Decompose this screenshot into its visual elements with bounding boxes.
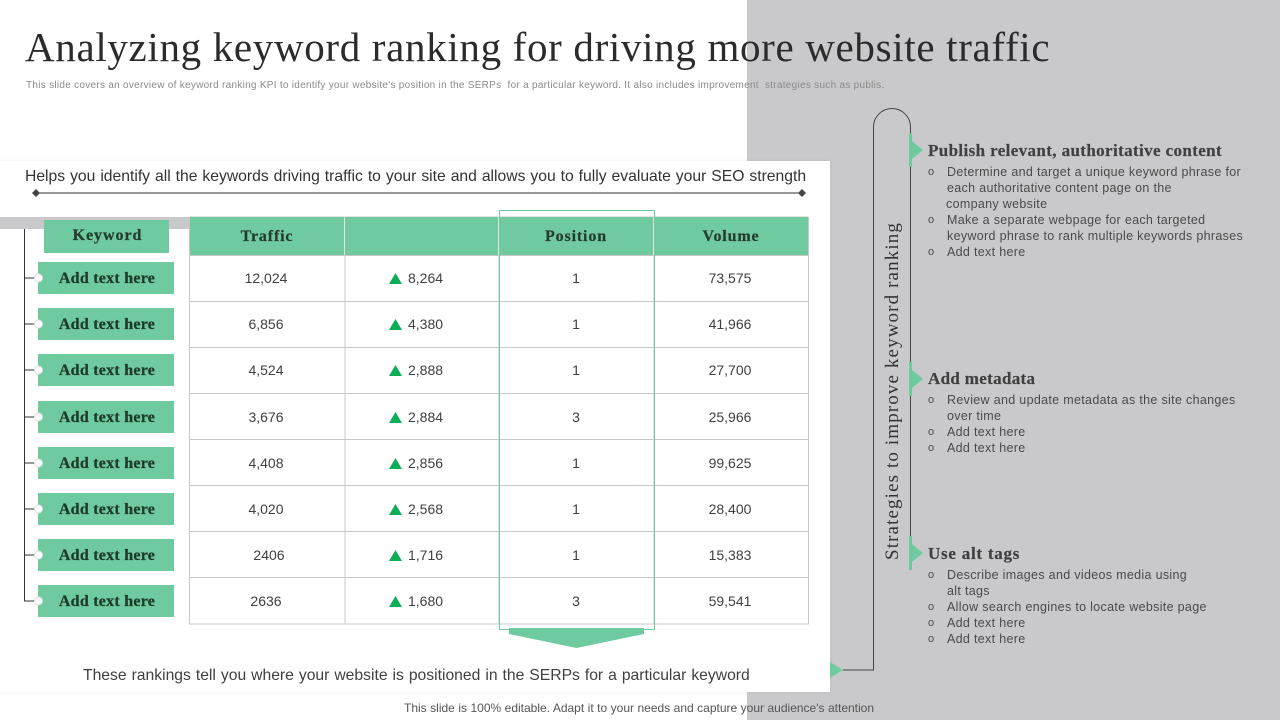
position column: 3 (572, 593, 580, 609)
arrow: connector from card to strategies (830, 108, 911, 678)
volume column: 59,541 (709, 593, 751, 609)
volume column: 41,966 (709, 316, 751, 332)
marker (909, 362, 923, 396)
keyword label 6: Add text here (59, 501, 155, 518)
panel: white table card (0, 161, 830, 692)
bullet text: use alt tags: Add text here (947, 632, 1026, 646)
bullet text: publish content: keyword phrase to rank multiple keywords phrases (947, 229, 1243, 243)
traffic column: 6,856 (248, 316, 284, 332)
keyword label 5 (38, 447, 174, 479)
header: change (blank) (345, 217, 498, 255)
footer note: This slide is 100% editable. Adapt it to your needs and capture your audience's attention (404, 701, 874, 715)
header: Traffic: Traffic (241, 228, 293, 245)
traffic column: 4,020 (248, 501, 284, 517)
keyword label 8: Add text here (59, 593, 155, 610)
change column with up triangles: 1,680 (408, 593, 443, 609)
bullet text: publish content: o (928, 246, 934, 258)
volume column: 25,966 (709, 409, 751, 425)
strategy: publish content (909, 133, 1222, 167)
keyword label 1: Add text here (59, 270, 155, 287)
bullet text: use alt tags: alt tags (947, 584, 990, 598)
subtitle: This slide covers an overview of keyword ranking KPI to identify your website's position in the SERPs for a particular keyword. It also includes improvement strategies such as publis. (26, 80, 885, 91)
volume column: 73,575 (709, 270, 751, 286)
keyword label 7 (38, 539, 174, 571)
bullet text: publish content: o (928, 166, 934, 178)
keyword label 6 (38, 493, 174, 525)
volume column: 99,625 (709, 455, 751, 471)
panel: grey right background (747, 0, 1280, 720)
bullet text: use alt tags: o (928, 569, 934, 581)
bullet text: add metadata: Add text here (947, 441, 1026, 455)
position column (572, 270, 580, 609)
change column with up triangles (389, 270, 443, 609)
position column: 1 (572, 316, 580, 332)
position column highlight outline (499, 210, 655, 630)
bottom statement: These rankings tell you where your website is positioned in the SERPs for a particular keyword (83, 667, 750, 684)
keyword label 4 (38, 401, 174, 433)
position column: 1 (572, 362, 580, 378)
heading: Add metadata (928, 369, 1035, 388)
position column: 1 (572, 501, 580, 517)
divider with diamond ends (32, 189, 806, 197)
keyword label 2: Add text here (59, 316, 155, 333)
header: Volume (654, 217, 808, 255)
bullet text: publish content (928, 165, 1243, 259)
change column with up triangles: 2,568 (408, 501, 443, 517)
bullet text: use alt tags: Allow search engines to locate website page (947, 600, 1207, 614)
traffic column: 12,024 (245, 270, 287, 286)
bullet text: publish content: Make a separate webpage for each targeted (947, 213, 1205, 227)
table grid (189, 216, 809, 624)
header: Position (499, 217, 653, 255)
heading: Publish relevant, authoritative content (928, 141, 1222, 160)
traffic column: 2406 (253, 547, 285, 563)
position column: 1 (572, 547, 580, 563)
bullet text: add metadata: o (928, 442, 934, 454)
bullet text: use alt tags: Describe images and videos media using (947, 568, 1187, 582)
connector dots (34, 274, 43, 606)
strategy: use alt tags (909, 536, 1020, 570)
keyword label 8 (38, 585, 174, 617)
heading: Use alt tags (928, 544, 1020, 563)
vertical heading: strategies: Strategies to improve keyword ranking (882, 222, 903, 560)
bullet text: add metadata: o (928, 394, 934, 406)
keyword label 1 (38, 262, 174, 294)
bullet text: use alt tags: o (928, 601, 934, 613)
title: Analyzing keyword ranking for driving more website traffic (25, 24, 1050, 70)
bullet text: use alt tags (928, 568, 1207, 646)
traffic column: 4,408 (248, 455, 284, 471)
volume column: 28,400 (709, 501, 751, 517)
bullet text: use alt tags: o (928, 633, 934, 645)
keyword column (24, 229, 34, 602)
volume column (708, 270, 751, 609)
marker (909, 133, 923, 167)
header: Volume: Volume (703, 228, 759, 245)
bullet text: use alt tags: Add text here (947, 616, 1026, 630)
bullet text: add metadata: over time (947, 409, 1001, 423)
traffic column (245, 270, 287, 609)
change column with up triangles: 4,380 (408, 316, 443, 332)
traffic column: 2636 (250, 593, 282, 609)
keyword header (44, 220, 169, 253)
traffic column: 4,524 (248, 362, 284, 378)
marker (909, 536, 923, 570)
change column with up triangles: 2,884 (408, 409, 443, 425)
change column with up triangles: 8,264 (408, 270, 443, 286)
keyword label 5: Add text here (59, 455, 155, 472)
keyword label 3: Add text here (59, 362, 155, 379)
grey strip behind keyword header (0, 217, 190, 229)
traffic column: 3,676 (248, 409, 284, 425)
bullet text: use alt tags: o (928, 617, 934, 629)
bullet text: publish content: company website (946, 197, 1047, 211)
table (189, 216, 809, 624)
bullet text: publish content: Add text here (947, 245, 1026, 259)
bullet text: add metadata (928, 393, 1236, 455)
bullet text: add metadata: Add text here (947, 425, 1026, 439)
bullet text: publish content: each authoritative content page on the (947, 181, 1172, 195)
keyword label 4: Add text here (59, 409, 155, 426)
keyword label 7: Add text here (59, 547, 155, 564)
strategy: add metadata (909, 362, 1035, 396)
position column: 1 (572, 270, 580, 286)
bullet text: publish content: o (928, 214, 934, 226)
header: Position: Position (545, 228, 607, 245)
volume column: 27,700 (709, 362, 751, 378)
keyword header: Keyword (73, 227, 142, 244)
header: Traffic (190, 217, 344, 255)
change column with up triangles: 2,856 (408, 455, 443, 471)
keyword label 2 (38, 308, 174, 340)
keyword tree connector (24, 229, 34, 602)
position column: 3 (572, 409, 580, 425)
change column with up triangles: 2,888 (408, 362, 443, 378)
change column with up triangles: 1,716 (408, 547, 443, 563)
keyword label 3 (38, 354, 174, 386)
volume column: 15,383 (709, 547, 751, 563)
arrow: position highlight pointing down (509, 628, 644, 648)
position column: 1 (572, 455, 580, 471)
bullet text: publish content: Determine and target a unique keyword phrase for (947, 165, 1241, 179)
bullet text: add metadata: o (928, 426, 934, 438)
top statement: Helps you identify all the keywords driving traffic to your site and allows you to fully evaluate your SEO strength (25, 168, 806, 185)
bullet text: add metadata: Review and update metadata as the site changes (947, 393, 1236, 407)
